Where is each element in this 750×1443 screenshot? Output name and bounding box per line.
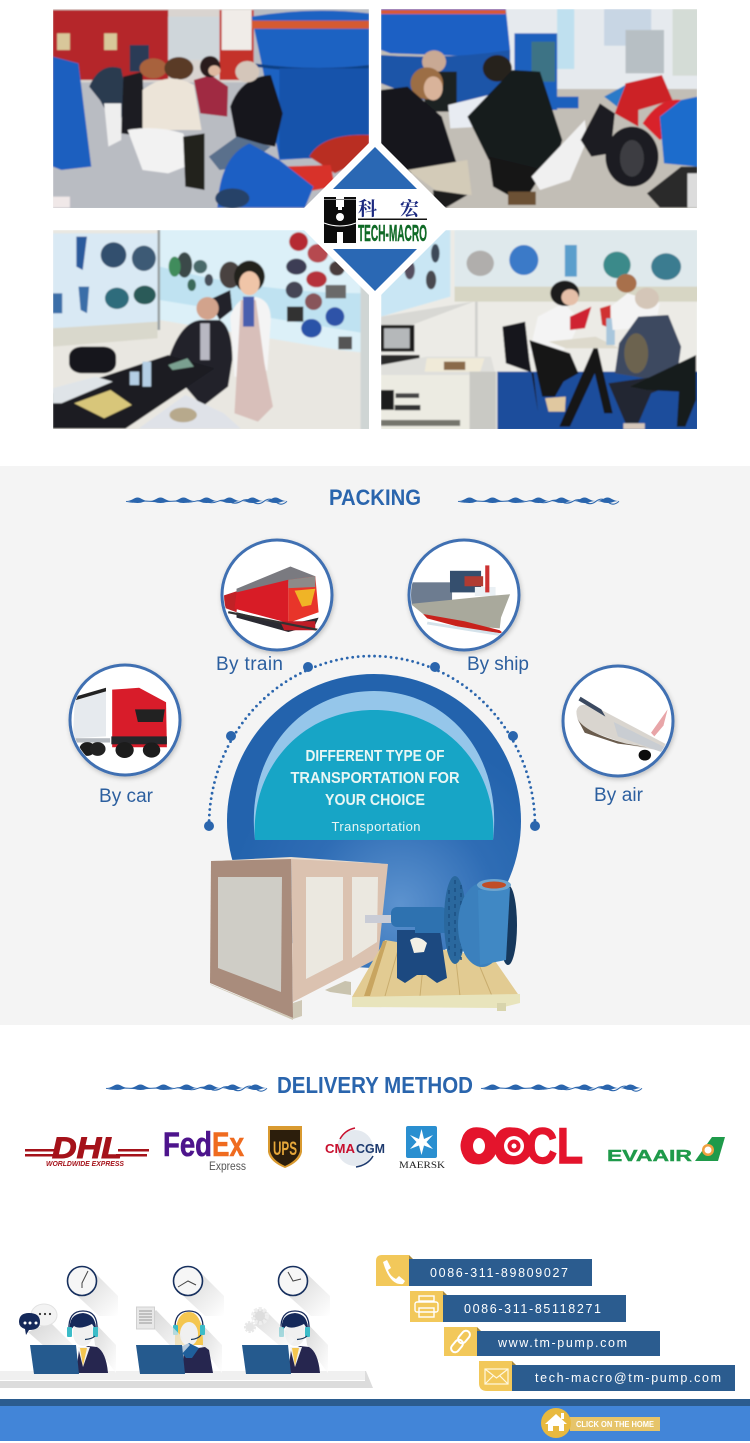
laptop 3 [242, 1345, 291, 1374]
agent 1 [67, 1311, 116, 1373]
diamond top triangle [333, 147, 417, 189]
logo: CMA CGM [325, 1128, 385, 1167]
wooden pallet [352, 940, 520, 1011]
heading wave left [126, 498, 287, 504]
contact: fax: 0086-311-85118271 [464, 1302, 601, 1316]
packing heading: PACKING [329, 485, 421, 510]
laptop 2 [136, 1345, 185, 1374]
icon: airplane [563, 666, 673, 776]
logo: UPS [268, 1126, 302, 1168]
dome text: YOUR CHOICE [325, 792, 425, 809]
logo: DHL: DHL [52, 1132, 122, 1165]
contact: website: www.tm-pump.com [497, 1336, 627, 1350]
photo: exhibition booth with blue pump tank [53, 9, 369, 209]
dome text: DIFFERENT TYPE OF [306, 748, 444, 765]
contact: email: tech-macro@tm-pump.com [535, 1371, 721, 1385]
logo: FedEx: Fed [163, 1126, 212, 1164]
logo: OOCL: OOCL [460, 1118, 583, 1174]
desk [0, 1371, 373, 1388]
icon: speech bubbles [19, 1304, 78, 1360]
clock 2 [174, 1266, 224, 1316]
clock 3 [278, 1266, 330, 1316]
logo chinese name: 科 [358, 194, 377, 221]
logo: EVA AIR [607, 1137, 725, 1165]
wooden crate [210, 857, 388, 1020]
delivery heading: DELIVERY METHOD [277, 1072, 473, 1098]
agent 3 [279, 1311, 328, 1373]
logo: DHL [25, 1132, 149, 1168]
logo diamond [293, 137, 457, 301]
contact: website [444, 1327, 660, 1356]
label: by train: By train [216, 654, 283, 675]
big blue circle [227, 674, 521, 968]
contact: email [479, 1361, 735, 1391]
logo: DHL: WORLDWIDE EXPRESS [46, 1161, 124, 1168]
logo: FedEx [163, 1126, 246, 1173]
label: by car: By car [99, 786, 154, 807]
blue pump [365, 876, 517, 983]
icon: document [136, 1307, 190, 1356]
agent 2 [173, 1311, 222, 1373]
panel: delivery method [25, 1072, 725, 1174]
icon: ship [409, 540, 519, 650]
logo: CMA CGM: CGM [356, 1141, 385, 1156]
logo: Maersk: MAERSK [399, 1161, 445, 1171]
dome caption: Transportation [332, 819, 420, 834]
logo: FedEx: Express [209, 1161, 246, 1173]
teal dome [255, 710, 493, 840]
home button label: CLICK ON THE HOME [576, 1419, 654, 1429]
logo diamond: TECH-MACRO [358, 220, 427, 246]
logo: UPS: UPS [273, 1139, 297, 1160]
light blue dome [254, 691, 494, 840]
photo: meeting beside rubber pump parts [381, 9, 698, 209]
photo: meeting at exhibition table [381, 230, 698, 430]
home button label [570, 1417, 660, 1431]
icon: truck [70, 665, 180, 775]
dome text: TRANSPORTATION FOR [290, 770, 460, 787]
heading wave right [481, 1084, 642, 1091]
dotted arc [204, 656, 540, 831]
logo: Maersk [399, 1126, 445, 1171]
logo chinese name second character: 宏 [400, 194, 420, 221]
label: by air: By air [594, 785, 644, 806]
icon: home [541, 1408, 571, 1438]
icon: train [222, 540, 332, 650]
logo: EVA AIR: EVAAIR [607, 1148, 693, 1165]
panel: customer service agents [0, 1266, 373, 1388]
H mark [324, 197, 356, 243]
dome text [290, 748, 460, 809]
clock 1 [68, 1266, 118, 1316]
photo: booth with posters and two people [53, 230, 371, 430]
diamond bottom triangle [333, 249, 417, 291]
panel: contact details [376, 1255, 735, 1391]
heading wave left [106, 1084, 267, 1091]
heading wave right [458, 498, 619, 504]
laptop 1 [30, 1345, 79, 1374]
logo: CMA CGM: CMA [325, 1141, 356, 1156]
contact: phone: 0086-311-89809027 [430, 1266, 568, 1280]
panel: packing [0, 466, 750, 1025]
icon: gears [246, 1309, 295, 1350]
footer bar [0, 1399, 750, 1441]
logo: FedEx: Ex [212, 1126, 244, 1164]
contact: fax [410, 1291, 626, 1322]
contact: phone [376, 1255, 592, 1286]
label: by ship: By ship [467, 654, 529, 675]
